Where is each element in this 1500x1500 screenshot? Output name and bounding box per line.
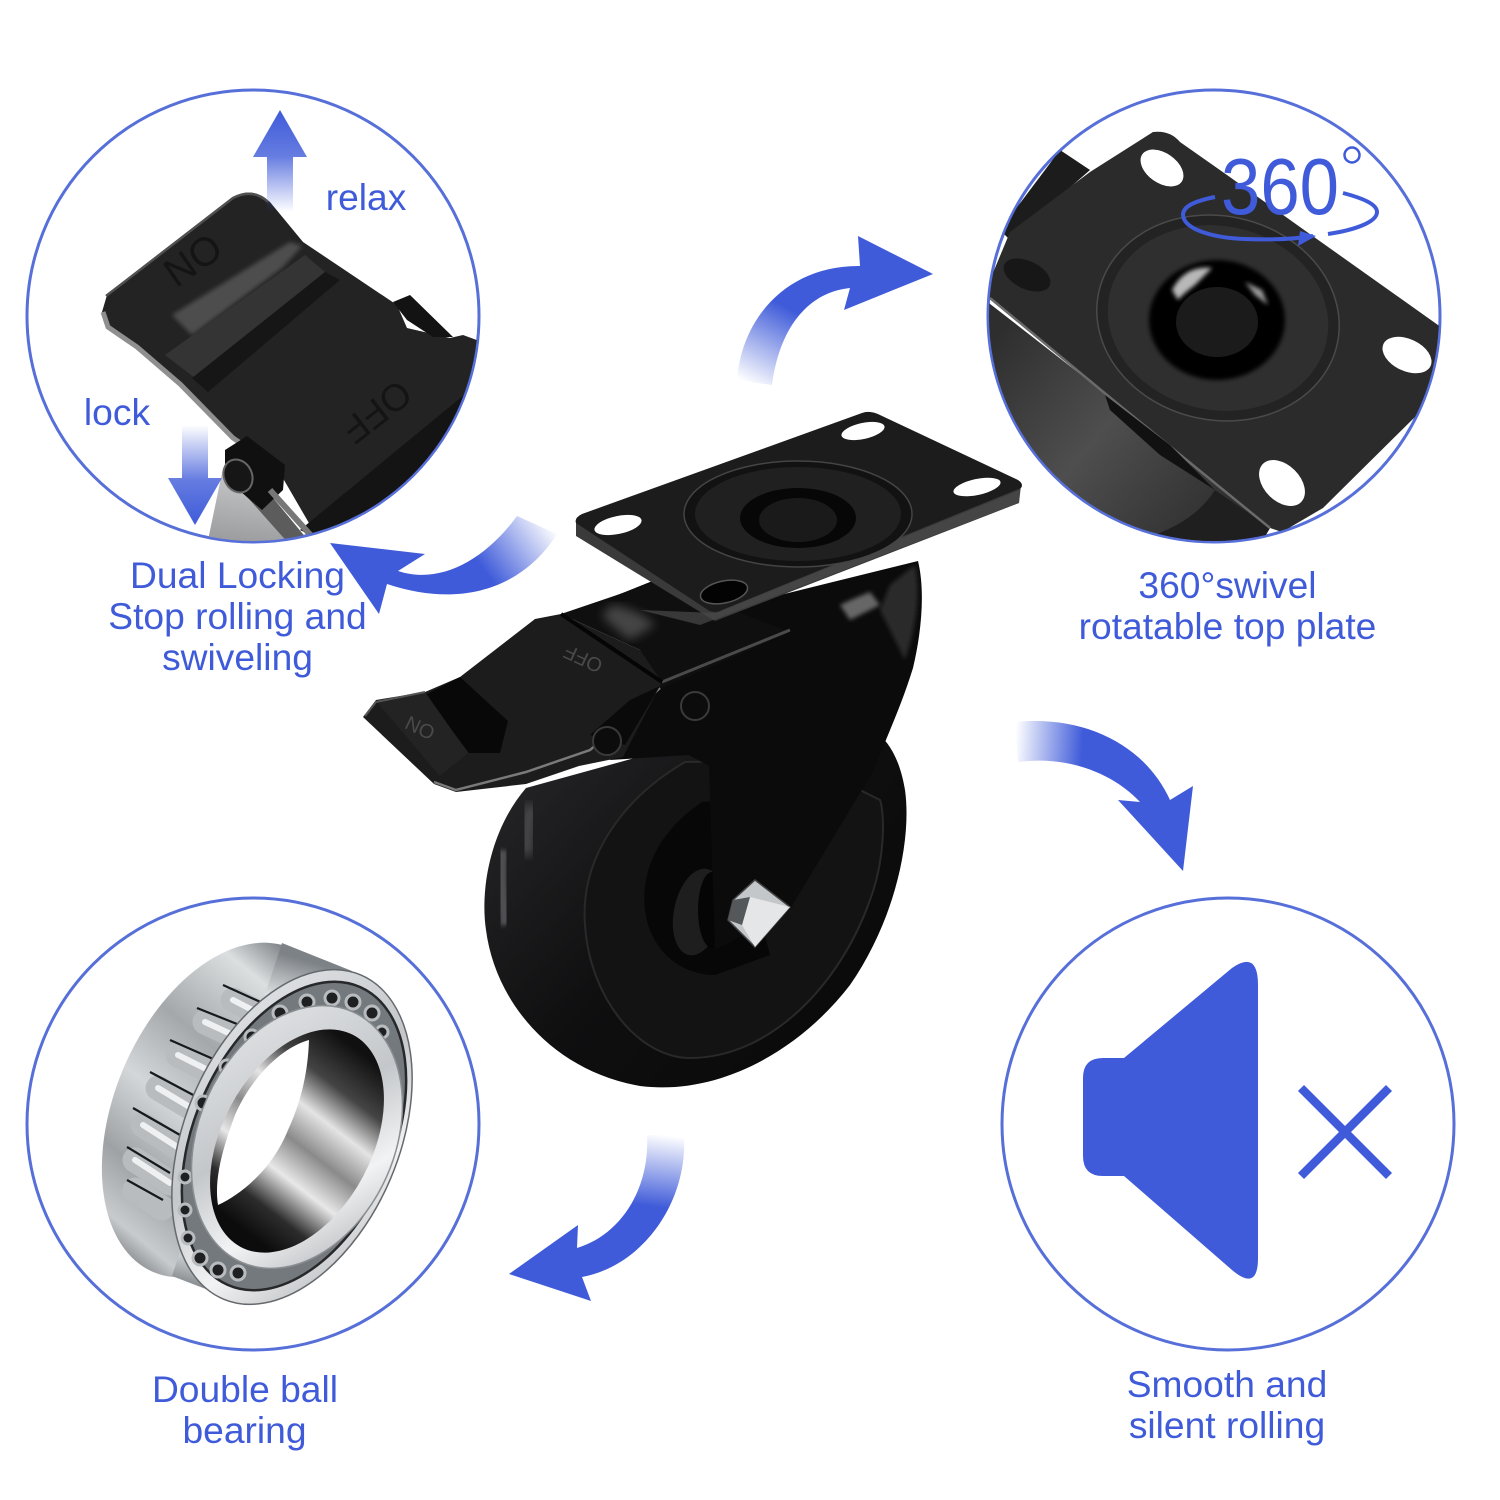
axle bolt [728,880,790,947]
icon: mute cross [1301,1088,1389,1176]
brake pedal: ON [402,711,439,743]
panel: swivel top plate circle [985,90,1445,545]
caption: double ball bearing: Double ball [152,1368,338,1410]
degree mark [1344,148,1360,162]
arrow: lock down [168,425,222,525]
top plate [576,412,1022,625]
caption: dual locking: swiveling [162,636,313,678]
label: relax: relax [326,176,407,218]
photo: top plate close-up [985,132,1445,545]
rollers [127,985,268,1208]
photo: brake pedal close-up: OFF [333,371,419,451]
arrow: to bearing [509,1135,684,1301]
photo: roller bearing [55,906,459,1341]
caption: 360 swivel: 360°swivel [1138,564,1317,606]
arrow: to brake [330,516,557,614]
caption: smooth and silent: silent rolling [1129,1404,1325,1446]
brake pedal [363,581,790,792]
caption: dual locking: Dual Locking [130,554,345,596]
label: 360 degrees: 360 [1221,142,1339,231]
caption: double ball bearing: bearing [182,1409,307,1451]
balls [179,991,388,1280]
panel: silent rolling circle [1002,898,1454,1350]
panel: dual locking circle [27,90,490,545]
photo: brake pedal close-up [102,193,490,545]
caption: smooth and silent: Smooth and [1127,1363,1327,1405]
caption: 360 swivel: rotatable top plate [1079,605,1376,647]
arrow: to silent panel [1015,721,1193,871]
photo: caster wheel [363,412,1022,1087]
icon: muted speaker [1083,962,1258,1279]
caption: dual locking: Stop rolling and [108,595,367,637]
label: lock: lock [84,391,150,433]
wheel [484,735,907,1087]
icon: rotation ring [1183,193,1377,239]
arrow: relax up [253,110,307,212]
photo: brake pedal close-up: ON [155,224,230,294]
fork bracket [610,561,922,949]
brake pedal: OFF [561,640,606,677]
panel: double ball bearing circle [27,898,479,1350]
arrow: to top plate [737,236,933,385]
